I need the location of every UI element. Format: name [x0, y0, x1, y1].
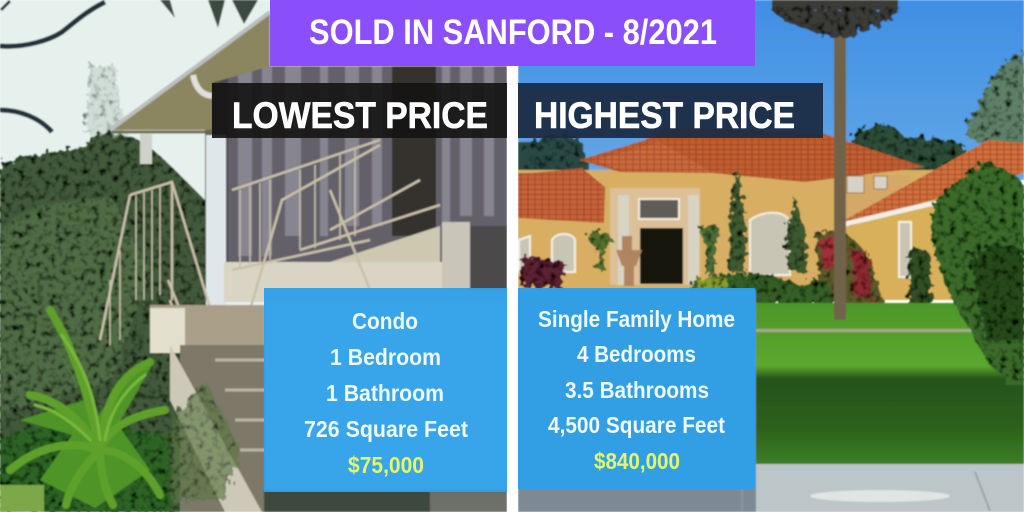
text: property type condo: Condo [352, 308, 418, 334]
text: bedrooms: 4 Bedrooms [577, 341, 696, 367]
photo detail: concrete sidewalk and driveway [518, 290, 1024, 512]
photo detail: front lawn [755, 302, 1024, 465]
photo: high-priced single family home [518, 0, 1024, 512]
heading: highest price: HIGHEST PRICE [534, 95, 795, 136]
text: bathrooms: 1 Bathroom [326, 380, 444, 406]
heading: lowest price: LOWEST PRICE [232, 95, 488, 136]
photo detail: tree line behind the house [518, 50, 1024, 178]
photo detail: tall palm tree [770, 0, 900, 320]
photo detail: dark branches at top left [0, 1, 105, 132]
photo detail: background tree foliage [0, 65, 215, 512]
photo detail: palm fronds at top [160, 0, 258, 28]
heading: lowest price [212, 83, 507, 138]
text: property type single family home: Single Family Home [538, 306, 735, 332]
panel: lowest price property details [264, 288, 507, 492]
photo detail: porch and stair railings [98, 138, 441, 346]
photo detail: cypress trees and shrubs [522, 170, 932, 310]
photo detail: green palm plants [0, 310, 507, 512]
text: sale price: $75,000 [348, 452, 424, 478]
photo: low-priced condo with exterior stairs [0, 0, 507, 512]
title banner [270, 0, 755, 66]
photo detail: arched windows [519, 213, 911, 277]
photo detail: yellow stucco walls [518, 168, 954, 301]
photo detail: upper windows [847, 176, 887, 193]
text: square feet: 726 Square Feet [304, 416, 468, 442]
text: square feet: 4,500 Square Feet [548, 412, 725, 438]
text: bathrooms: 3.5 Bathrooms [565, 377, 709, 403]
photo detail: arched entry with black door and fountain [610, 188, 700, 286]
photo detail: wooden stair landing [150, 305, 265, 512]
photo detail: screened porch wall [205, 66, 507, 305]
photo detail: terracotta roofs [518, 126, 1024, 226]
text: sale price: $840,000 [594, 448, 680, 474]
photo detail: shrub tree at right edge [932, 160, 1024, 385]
photo detail: roof eave and gutter [110, 12, 270, 164]
title banner: SOLD IN SANFORD - 8/2021 [309, 13, 717, 52]
panel: highest price property details [518, 288, 755, 489]
text: bedrooms: 1 Bedroom [330, 344, 441, 370]
